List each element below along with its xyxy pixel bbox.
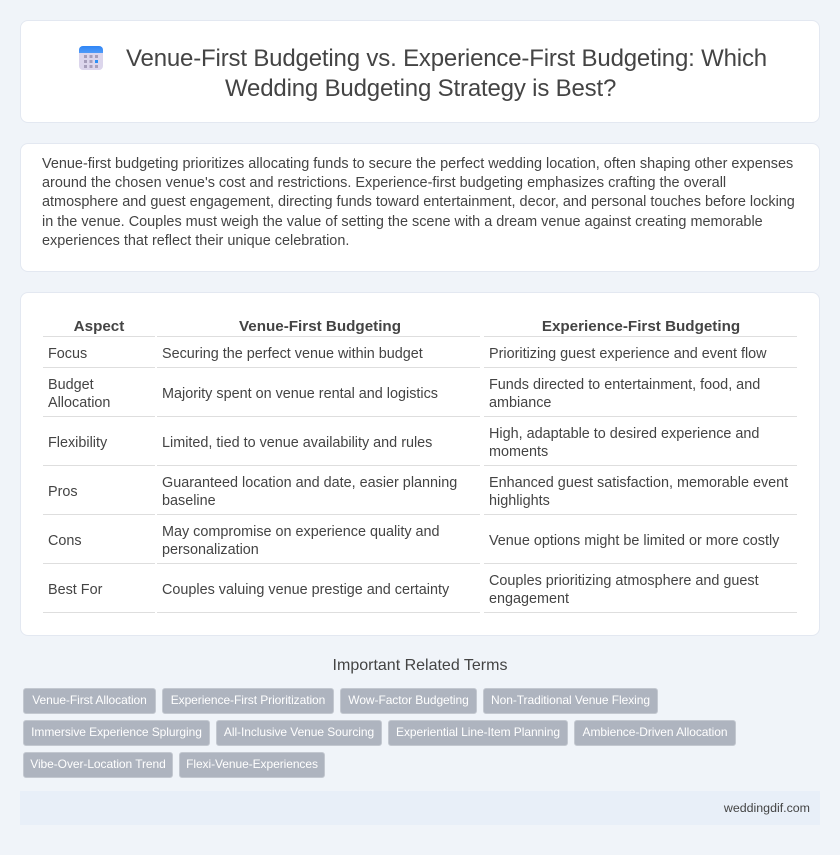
intro text: around the chosen venue's cost and restrictions. Experience-first budgeting emphasizes crafting the overall <box>42 175 726 191</box>
footer source: weddingdif.com <box>724 801 810 815</box>
comparison table: Majority spent on venue rental and logistics <box>162 386 438 402</box>
related terms tags: Ambience-Driven Allocation <box>583 725 727 739</box>
intro text: atmosphere and guest engagement, directing funds toward entertainment, decor, and personal touches before locking <box>42 194 795 210</box>
intro text <box>42 156 795 249</box>
comparison table: Aspect <box>74 318 124 334</box>
related terms tags <box>23 688 736 778</box>
intro text: Venue-first budgeting prioritizes allocating funds to secure the perfect wedding location, often shaping other expenses <box>42 156 793 172</box>
title <box>126 45 767 102</box>
comparison table: Guaranteed location and date, easier planning <box>162 475 457 491</box>
comparison table: highlights <box>489 493 550 509</box>
comparison table: Securing the perfect venue within budget <box>162 346 423 362</box>
comparison table: Limited, tied to venue availability and rules <box>162 435 432 451</box>
related terms tags: Flexi-Venue-Experiences <box>186 757 318 771</box>
comparison table: Venue options might be limited or more costly <box>489 533 779 549</box>
header panel <box>20 20 820 123</box>
panel: intro paragraph <box>20 143 820 272</box>
related terms tags: Vibe-Over-Location Trend <box>30 757 166 771</box>
panel: comparison table <box>20 292 820 636</box>
comparison table: Venue-First Budgeting <box>239 318 401 334</box>
comparison table: Allocation <box>48 395 110 411</box>
comparison table: Best For <box>48 582 102 598</box>
icon: calendar <box>79 46 103 70</box>
related terms tags: Experience-First Prioritization <box>171 693 325 707</box>
footer bar <box>20 791 820 825</box>
comparison table: Flexibility <box>48 435 107 451</box>
comparison table: Focus <box>48 346 87 362</box>
comparison table: engagement <box>489 591 569 607</box>
comparison table: May compromise on experience quality and <box>162 524 440 540</box>
title: Venue-First Budgeting vs. Experience-First Budgeting: Which <box>126 45 767 72</box>
comparison table: Funds directed to entertainment, food, and <box>489 377 760 393</box>
related terms tags: Venue-First Allocation <box>32 693 147 707</box>
related terms tags: Immersive Experience Splurging <box>31 725 202 739</box>
comparison table: Prioritizing guest experience and event flow <box>489 346 767 362</box>
comparison table: ambiance <box>489 395 551 411</box>
comparison table: personalization <box>162 542 259 558</box>
comparison table: Experience-First Budgeting <box>542 318 740 334</box>
comparison table: Pros <box>48 484 78 500</box>
comparison table: baseline <box>162 493 216 509</box>
intro text: in the venue. Couples must weigh the value of setting the scene with a dream venue against creating memorable <box>42 214 763 230</box>
heading: related terms: Important Related Terms <box>333 657 507 674</box>
comparison table: Cons <box>48 533 82 549</box>
comparison table: Couples prioritizing atmosphere and guest <box>489 573 759 589</box>
comparison table: High, adaptable to desired experience and <box>489 426 759 442</box>
related terms tags: Non-Traditional Venue Flexing <box>491 693 650 707</box>
comparison table <box>43 318 797 613</box>
related terms tags: Wow-Factor Budgeting <box>348 693 469 707</box>
comparison table: Enhanced guest satisfaction, memorable event <box>489 475 788 491</box>
intro text: experiences that reflect their unique celebration. <box>42 233 349 249</box>
comparison table: moments <box>489 444 548 460</box>
comparison table: Budget <box>48 377 94 393</box>
related terms tags: Experiential Line-Item Planning <box>396 725 560 739</box>
related terms tags: All-Inclusive Venue Sourcing <box>224 725 374 739</box>
title: Wedding Budgeting Strategy is Best? <box>225 75 616 102</box>
comparison table: Couples valuing venue prestige and certainty <box>162 582 449 598</box>
